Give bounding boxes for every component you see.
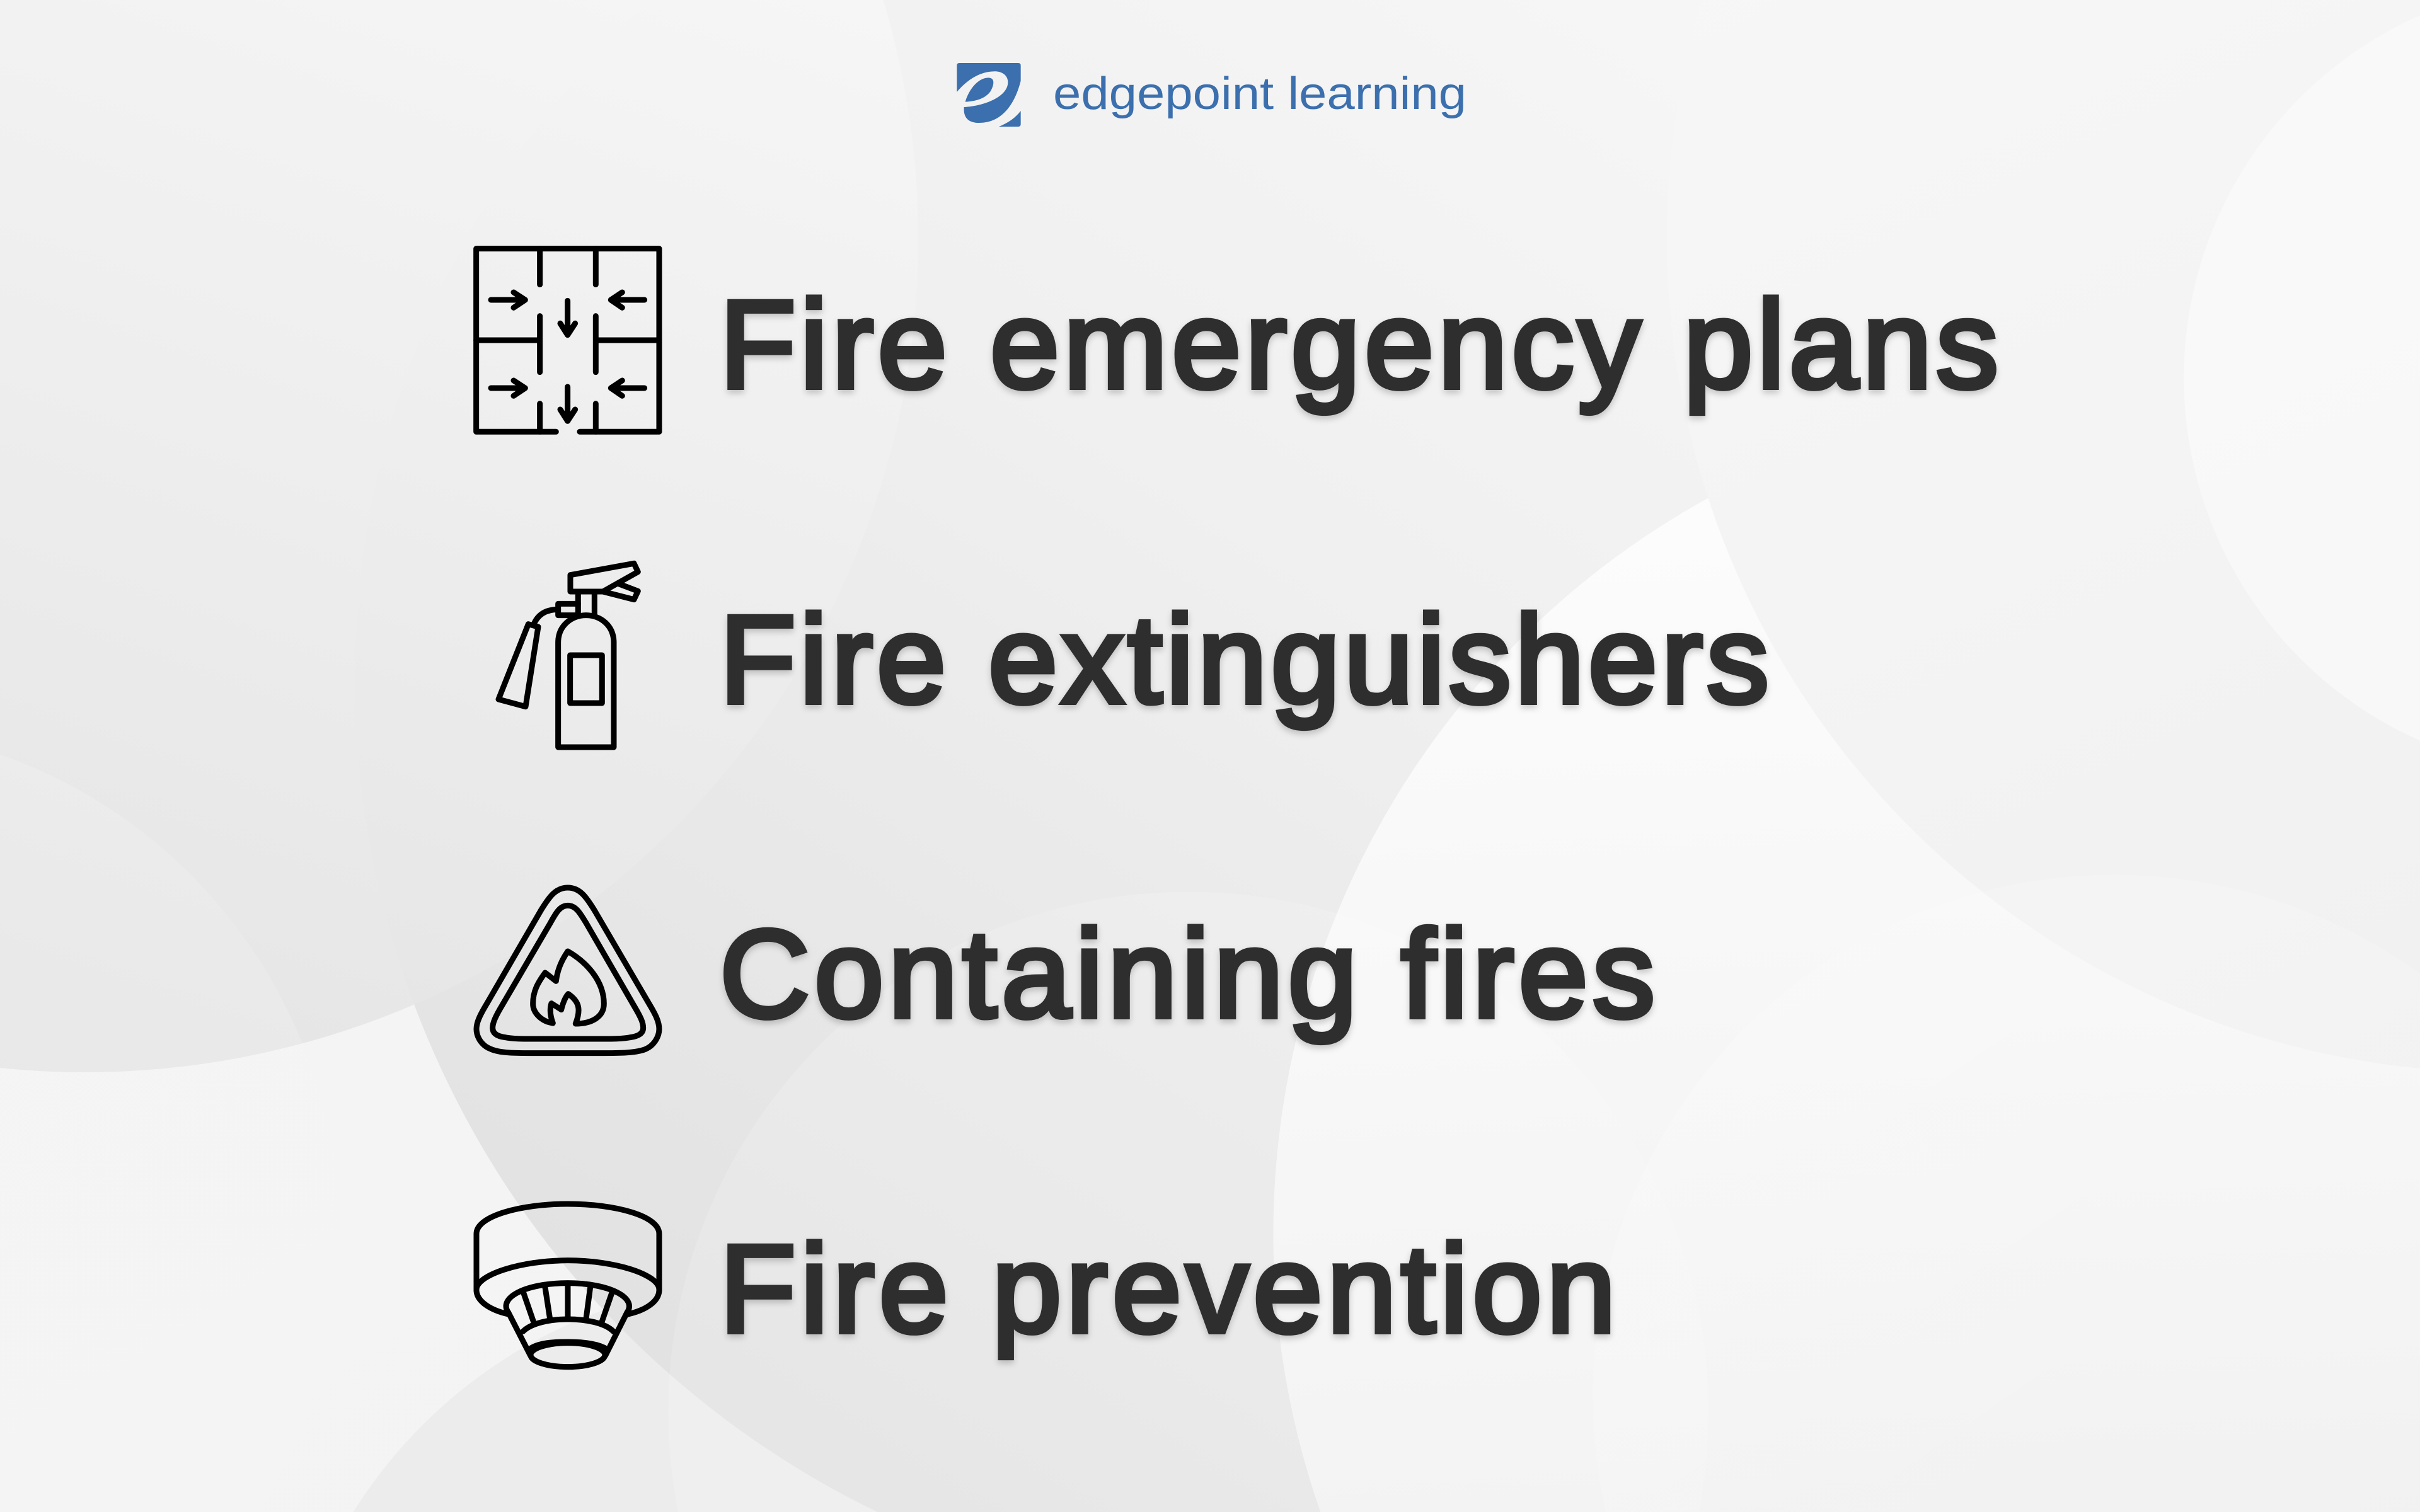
label: Containing fires: Containing fires (720, 904, 1655, 1043)
logo: edgepoint learning (957, 63, 1466, 127)
icon: fire warning triangle (476, 888, 659, 1053)
logo mark (957, 63, 1021, 127)
icon: smoke detector (476, 1204, 659, 1367)
label: Fire extinguishers: Fire extinguishers (720, 590, 1769, 729)
icon: evacuation floor plan (476, 249, 659, 432)
icon: fire extinguisher (498, 563, 638, 747)
logo wordmark: edgepoint learning (1053, 69, 1466, 119)
label: Fire prevention: Fire prevention (720, 1219, 1616, 1358)
label: Fire emergency plans: Fire emergency plans (720, 275, 1998, 414)
